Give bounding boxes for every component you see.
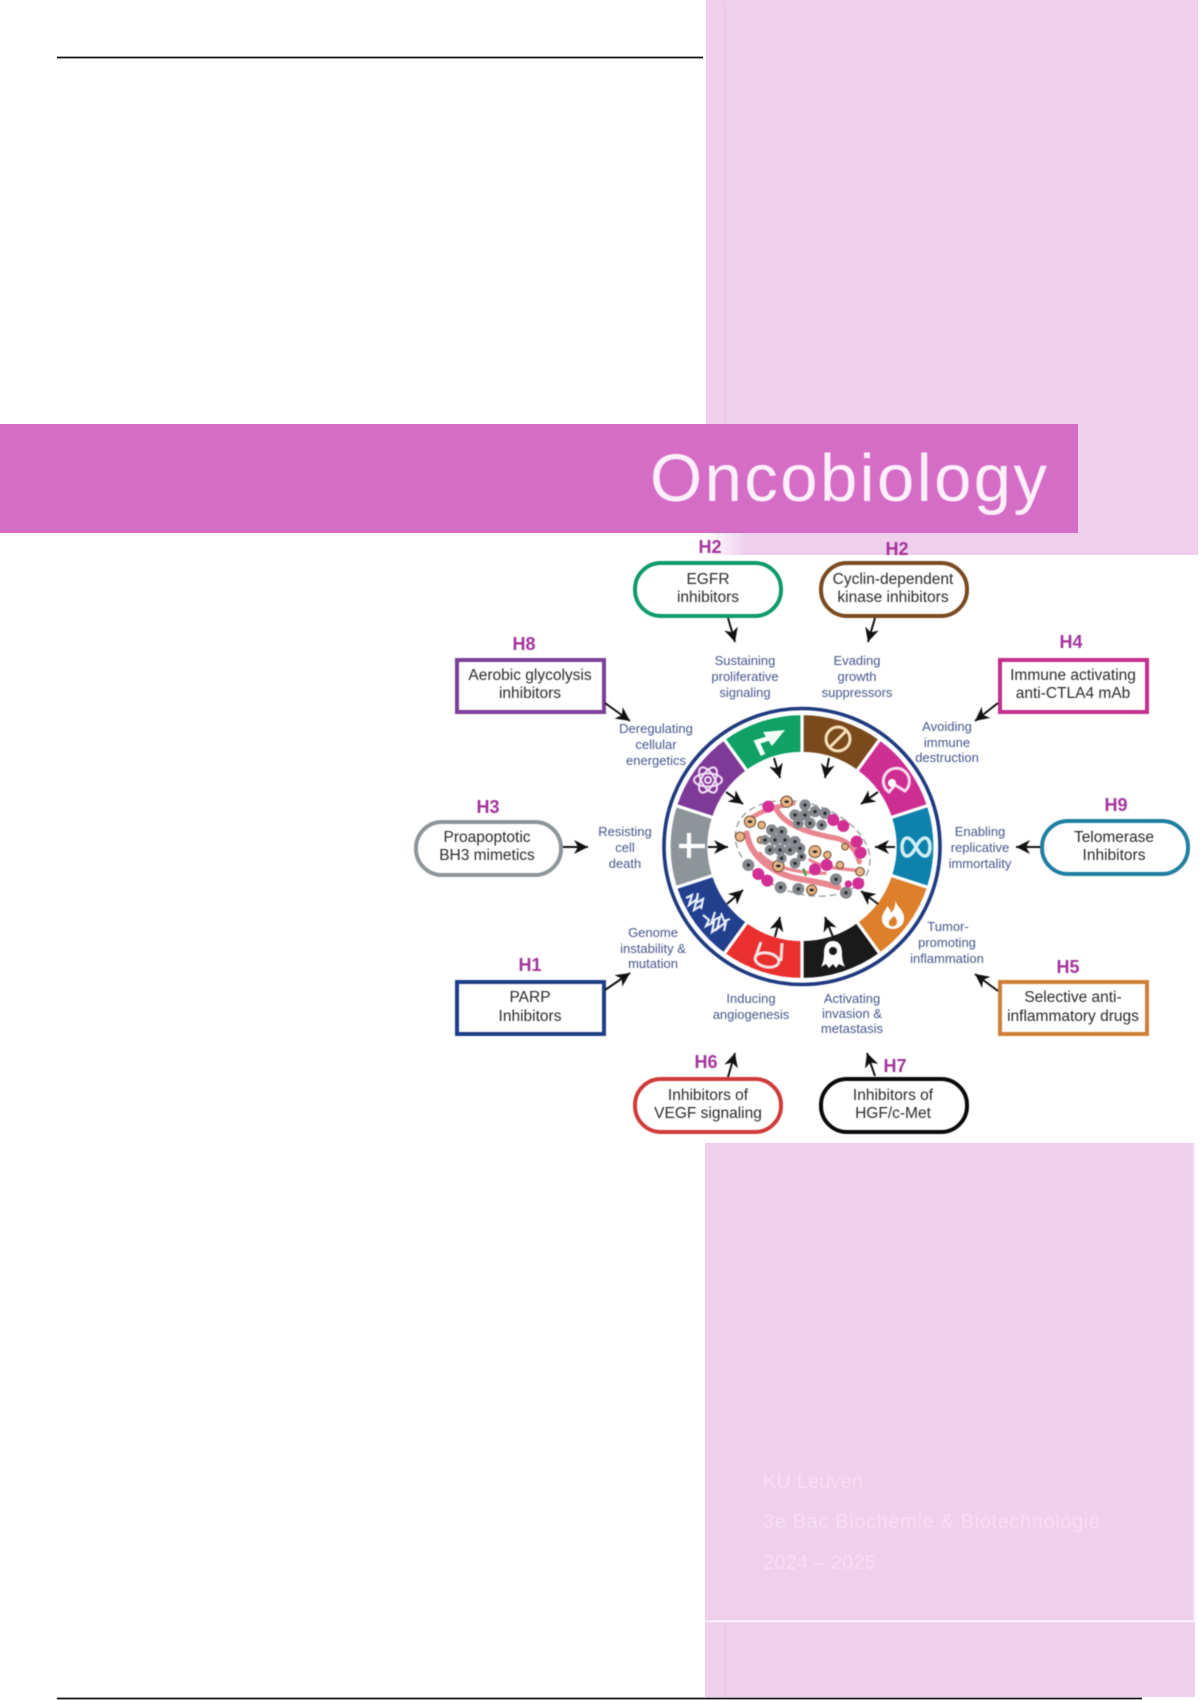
label: deregulating cellular energetics: cellular bbox=[635, 737, 677, 752]
callout: H2 EGFR inhibitors: EGFR bbox=[686, 571, 730, 588]
callout: H8 aerobic glycolysis inhibitors bbox=[457, 634, 604, 712]
callout: H4 immune activating anti-CTLA4 mAb bbox=[1000, 632, 1147, 712]
callout: H2 EGFR inhibitors bbox=[635, 537, 781, 616]
text block: institution and year: 3e Bac Biochemie & Biotechnologie bbox=[763, 1511, 1100, 1533]
label: enabling replicative immortality: immortality bbox=[949, 856, 1012, 871]
callout: H3 proapoptotic BH3 mimetics bbox=[416, 797, 561, 875]
label: resisting cell death: cell bbox=[615, 840, 635, 855]
callout: H8 aerobic glycolysis inhibitors: H8 bbox=[512, 634, 536, 654]
arrow: BH3 mimetics to cell death bbox=[563, 846, 588, 848]
title banner bbox=[0, 424, 1078, 533]
label: sustaining proliferative signaling: signaling bbox=[719, 685, 771, 700]
icon: cross bbox=[679, 833, 705, 858]
label: resisting cell death: Resisting bbox=[598, 824, 652, 839]
label: tumor-promoting inflammation: Tumor- bbox=[927, 919, 969, 934]
label: genome instability and mutation: mutation bbox=[628, 956, 678, 971]
bottom rule bbox=[57, 1698, 1142, 1700]
text block: institution and year: KU Leuven bbox=[763, 1471, 863, 1493]
icon: metastatic cell bbox=[821, 941, 845, 968]
callout: H7 inhibitors of HGF/c-Met bbox=[821, 1056, 967, 1132]
icon: growth arrow bbox=[757, 730, 785, 755]
label: activating invasion and metastasis: invasion & bbox=[822, 1006, 882, 1021]
callout: H9 telomerase inhibitors: Inhibitors bbox=[1083, 847, 1146, 864]
arrow: telomerase inhibitors to immortality bbox=[1016, 846, 1040, 848]
callout: H3 proapoptotic BH3 mimetics: H3 bbox=[476, 797, 500, 817]
callout: H5 selective anti-inflammatory drugs: Selective anti- bbox=[1024, 989, 1122, 1006]
callout: H3 proapoptotic BH3 mimetics: BH3 mimetics bbox=[439, 847, 535, 864]
title: Oncobiology bbox=[650, 441, 1048, 516]
arrow: glycolysis inhibitors to cellular energetics bbox=[605, 703, 630, 721]
text block: institution and year bbox=[763, 1471, 1100, 1574]
label: inducing angiogenesis: angiogenesis bbox=[713, 1007, 790, 1022]
label: inducing angiogenesis: Inducing bbox=[726, 991, 776, 1006]
callout: H5 selective anti-inflammatory drugs: inflammatory drugs bbox=[1007, 1008, 1139, 1025]
label: enabling replicative immortality: Enabling bbox=[955, 824, 1005, 839]
label: genome instability and mutation: Genome bbox=[628, 925, 678, 940]
label: tumor-promoting inflammation: promoting bbox=[918, 935, 976, 950]
icon: infinity bbox=[902, 838, 930, 856]
callout: H2 cyclin-dependent kinase inhibitors: kinase inhibitors bbox=[837, 589, 949, 606]
callout: H8 aerobic glycolysis inhibitors: Aerobic glycolysis bbox=[468, 667, 592, 684]
callout: H2 EGFR inhibitors: inhibitors bbox=[677, 589, 739, 606]
callout: H7 inhibitors of HGF/c-Met: HGF/c-Met bbox=[855, 1105, 932, 1122]
label: resisting cell death: death bbox=[609, 856, 641, 871]
callout: H6 inhibitors of VEGF signaling bbox=[635, 1052, 781, 1132]
callout: H7 inhibitors of HGF/c-Met: Inhibitors of bbox=[853, 1087, 934, 1104]
callout: H8 aerobic glycolysis inhibitors: inhibitors bbox=[499, 685, 561, 702]
label: genome instability and mutation: instability & bbox=[620, 941, 686, 956]
callout: H9 telomerase inhibitors: H9 bbox=[1104, 795, 1128, 815]
icon: chromosomes bbox=[686, 893, 730, 932]
arrow: VEGF inhibitors to angiogenesis bbox=[728, 1053, 735, 1077]
hallmark ring bbox=[651, 693, 953, 1000]
icon: atom bbox=[694, 765, 722, 795]
icon: blood vessel bbox=[754, 942, 782, 969]
tumor cell cluster bbox=[723, 784, 882, 913]
inner arrows pointing to tumor bbox=[708, 758, 895, 937]
label: deregulating cellular energetics: Deregulating bbox=[619, 721, 693, 736]
label: avoiding immune destruction: destruction bbox=[915, 750, 979, 765]
panel: upper pink background bbox=[706, 0, 1198, 556]
callout: H3 proapoptotic BH3 mimetics: Proapoptotic bbox=[443, 829, 531, 846]
label: sustaining proliferative signaling: proliferative bbox=[711, 669, 779, 684]
callout: H1 PARP inhibitors: PARP bbox=[509, 989, 551, 1006]
callout: H4 immune activating anti-CTLA4 mAb: Immune activating bbox=[1010, 667, 1136, 684]
callout: H1 PARP inhibitors: Inhibitors bbox=[499, 1008, 562, 1025]
callout: H9 telomerase inhibitors: Telomerase bbox=[1074, 829, 1154, 846]
arrow: anti-CTLA4 to immune destruction bbox=[975, 703, 998, 721]
callout: H5 selective anti-inflammatory drugs: H5 bbox=[1056, 957, 1080, 977]
label: deregulating cellular energetics: energetics bbox=[626, 753, 686, 768]
callout: H4 immune activating anti-CTLA4 mAb: H4 bbox=[1059, 632, 1083, 652]
callout: H4 immune activating anti-CTLA4 mAb: anti-CTLA4 mAb bbox=[1016, 685, 1130, 702]
chart: hallmarks of cancer diagram bbox=[416, 537, 1188, 1132]
icon: immune cell bbox=[883, 768, 909, 792]
callout: H2 cyclin-dependent kinase inhibitors bbox=[821, 539, 967, 616]
top rule bbox=[57, 56, 703, 58]
arrow: PARP inhibitors to genome instability bbox=[605, 973, 630, 990]
callout: H2 cyclin-dependent kinase inhibitors: H2 bbox=[885, 539, 909, 559]
label: evading growth suppressors: growth bbox=[837, 669, 877, 684]
icon: prohibition sign bbox=[826, 727, 850, 751]
callout: H1 PARP inhibitors bbox=[457, 955, 604, 1034]
arrow: EGFR to proliferative signaling bbox=[728, 618, 735, 642]
callout: H7 inhibitors of HGF/c-Met: H7 bbox=[883, 1056, 907, 1076]
callout: H2 cyclin-dependent kinase inhibitors: Cyclin-dependent bbox=[833, 571, 954, 588]
label: avoiding immune destruction: immune bbox=[924, 735, 970, 750]
callout: H1 PARP inhibitors: H1 bbox=[518, 955, 542, 975]
arrow: HGF/c-Met inhibitors to invasion bbox=[867, 1053, 875, 1076]
callout: H2 EGFR inhibitors: H2 bbox=[698, 537, 722, 557]
callout: H6 inhibitors of VEGF signaling: Inhibitors of bbox=[668, 1087, 749, 1104]
label: enabling replicative immortality: replicative bbox=[951, 840, 1009, 855]
label: evading growth suppressors: suppressors bbox=[822, 685, 893, 700]
callout: H5 selective anti-inflammatory drugs bbox=[1000, 957, 1147, 1034]
callout: H6 inhibitors of VEGF signaling: H6 bbox=[694, 1052, 718, 1072]
callout: H6 inhibitors of VEGF signaling: VEGF signaling bbox=[654, 1105, 762, 1122]
label: activating invasion and metastasis: Activating bbox=[824, 991, 880, 1006]
arrow: anti-inflammatory drugs to inflammation bbox=[975, 974, 998, 991]
label: tumor-promoting inflammation: inflammation bbox=[910, 951, 984, 966]
label: activating invasion and metastasis: metastasis bbox=[821, 1021, 884, 1036]
label: sustaining proliferative signaling: Sustaining bbox=[715, 653, 775, 668]
label: evading growth suppressors: Evading bbox=[834, 653, 880, 668]
panel: lower pink background bbox=[705, 1143, 1195, 1697]
callout: H9 telomerase inhibitors bbox=[1042, 795, 1188, 874]
icon: flame bbox=[882, 900, 904, 929]
text block: institution and year: 2024 – 2025 bbox=[763, 1552, 876, 1574]
arrow: cyclin inhibitors to growth suppressors bbox=[868, 618, 875, 642]
label: avoiding immune destruction: Avoiding bbox=[922, 719, 972, 734]
